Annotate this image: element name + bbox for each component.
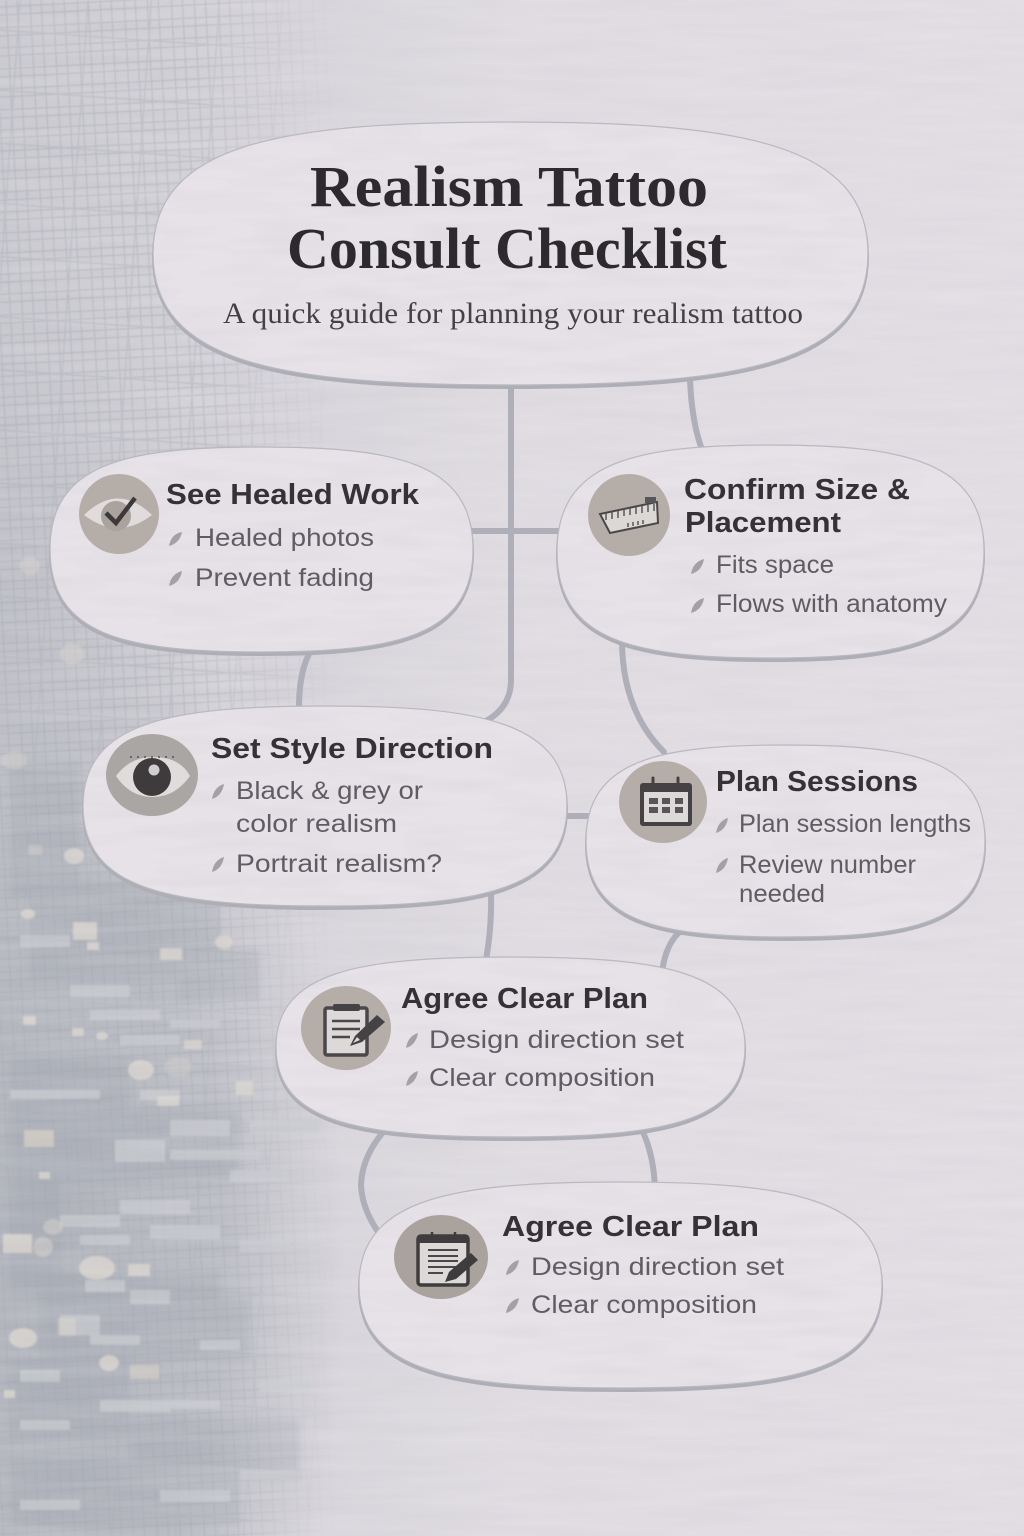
checklist: Design direction set <box>531 1253 784 1281</box>
checklist: Flows with anatomy <box>716 590 948 618</box>
panel: confirm size and placement <box>557 445 984 661</box>
checklist: Design direction set <box>429 1026 684 1054</box>
checklist <box>691 551 948 618</box>
icon: measuring tape <box>588 474 670 556</box>
panel: agree clear plan <box>276 957 745 1140</box>
title: Consult Checklist <box>287 216 728 281</box>
heading: Plan Sessions <box>716 766 918 798</box>
checklist: Clear composition <box>531 1291 757 1319</box>
panel: see healed work <box>50 447 473 655</box>
checklist: color realism <box>236 810 397 838</box>
checklist <box>212 777 442 878</box>
heading: Agree Clear Plan <box>502 1211 759 1243</box>
icon: clipboard with pencil <box>301 986 391 1070</box>
subtitle: A quick guide for planning your realism tattoo <box>223 297 803 330</box>
checklist: Fits space <box>716 551 834 579</box>
checklist <box>716 810 971 908</box>
checklist <box>406 1026 684 1092</box>
checklist <box>169 524 374 592</box>
checklist: Clear composition <box>429 1064 655 1092</box>
heading: Set Style Direction <box>211 733 493 765</box>
checklist <box>506 1253 784 1319</box>
icon: eye with check <box>79 474 159 554</box>
panel: agree clear plan (second) <box>359 1182 882 1391</box>
checklist: Portrait realism? <box>236 850 442 878</box>
icon: eye <box>106 734 198 816</box>
checklist: Plan session lengths <box>739 810 971 838</box>
icon: calendar <box>619 761 707 843</box>
title: Realism Tattoo <box>310 154 708 219</box>
heading: Confirm Size & <box>684 474 910 506</box>
panel: set style direction <box>83 706 567 909</box>
panel: plan sessions <box>586 745 985 940</box>
heading: Placement <box>685 507 841 539</box>
checklist: Healed photos <box>195 524 374 552</box>
connector lines between panels <box>299 380 703 1240</box>
heading: See Healed Work <box>166 479 420 511</box>
panel: title <box>153 122 868 388</box>
title <box>287 154 728 281</box>
checklist: needed <box>739 880 825 908</box>
heading: Agree Clear Plan <box>401 983 648 1015</box>
checklist: Black & grey or <box>236 777 423 805</box>
icon: notepad with pencil <box>394 1215 488 1299</box>
heading <box>684 474 910 539</box>
checklist: Review number <box>739 851 916 879</box>
checklist: Prevent fading <box>195 564 374 592</box>
